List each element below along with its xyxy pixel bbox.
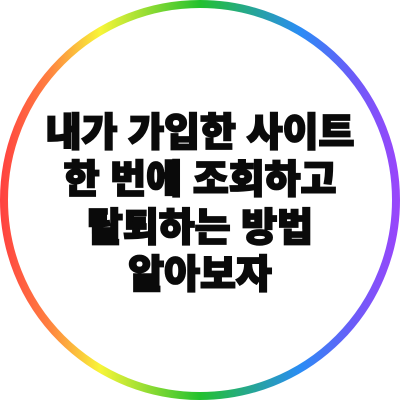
title <box>46 112 354 297</box>
title: 한 번에 조회하고 <box>64 159 336 202</box>
title: 탈퇴하는 방법 <box>87 207 313 250</box>
title: 내가 가입한 사이트 <box>46 112 354 155</box>
title: 알아보자 <box>128 254 272 297</box>
